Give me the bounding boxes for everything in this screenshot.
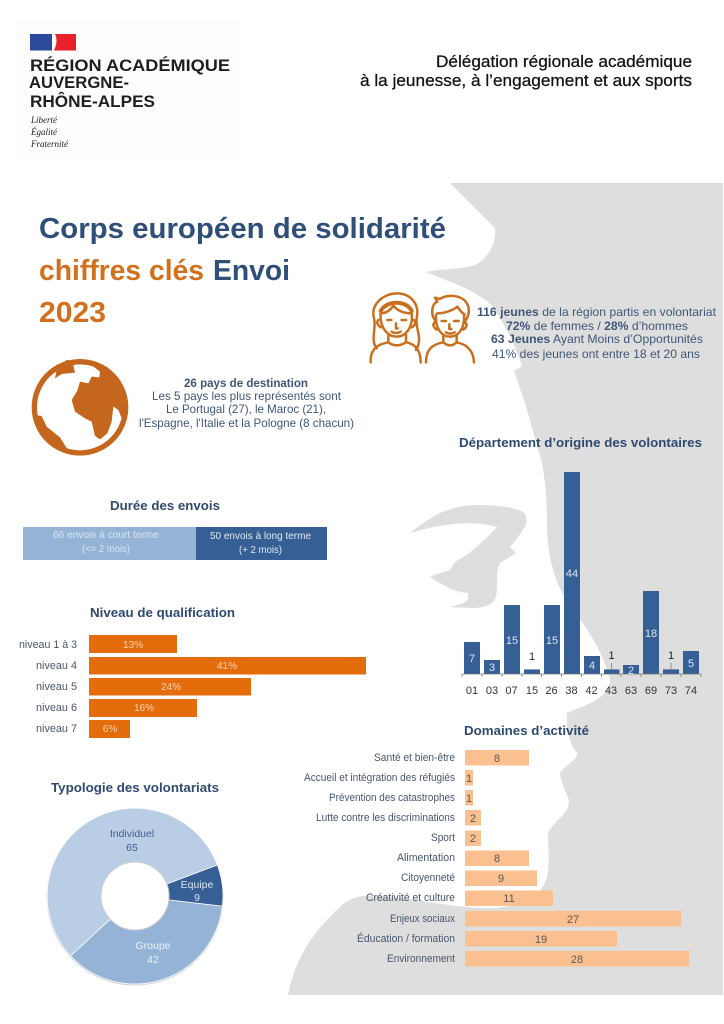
logo name: RHÔNE-ALPES <box>30 92 155 111</box>
chart: département d'origine: 38 <box>565 685 578 697</box>
chart: domaines d'activité: Environnement <box>387 953 455 965</box>
chart: domaines d'activité: Éducation / formation <box>357 932 455 945</box>
text: young people statistics: 72% de femmes / 28% d’hommes <box>506 319 688 333</box>
chart: département d'origine: 42 <box>585 685 598 697</box>
chart: domaines d'activité: 2 <box>470 813 476 825</box>
chart: niveau de qualification: 41% <box>217 661 237 672</box>
chart: domaines d'activité: 8 <box>494 753 500 765</box>
chart: domaines d'activité: 8 <box>494 853 500 865</box>
chart: domaines d'activité: Santé et bien-être <box>374 752 455 764</box>
chart: domaines d'activité: Prévention des catastrophes <box>329 792 455 804</box>
chart: département d'origine: 15 <box>546 635 558 647</box>
chart: domaines d'activité: 27 <box>567 914 579 926</box>
text: destinations: Le Portugal (27), le Maroc (21), <box>166 402 326 416</box>
chart: domaines d'activité: 1 <box>466 773 472 785</box>
title: 2023 <box>39 297 106 329</box>
title: Envoi <box>213 255 290 287</box>
icon: globe <box>34 360 127 453</box>
chart: département d'origine: 73 <box>665 685 677 697</box>
chart: typologie donut <box>46 808 224 986</box>
logo motto: Égalité <box>30 127 58 137</box>
chart: niveau de qualification: 24% <box>161 682 181 693</box>
logo: région académique <box>15 20 240 158</box>
heading: typologie des volontariats: Typologie des volontariats <box>51 780 219 795</box>
chart: typologie donut: Individuel <box>110 828 154 840</box>
chart: département d'origine: 07 <box>505 685 518 697</box>
icon: young people <box>371 293 474 362</box>
logo name <box>29 56 230 111</box>
text: destinations <box>139 376 354 430</box>
chart: département d'origine: 18 <box>645 628 657 640</box>
chart: domaines d'activité: Citoyenneté <box>401 872 455 884</box>
chart: durée des envois <box>23 527 327 560</box>
text: destinations: 26 pays de destination <box>184 376 308 390</box>
chart: durée des envois: 66 envois à court terme <box>53 529 159 541</box>
chart: département d'origine: 03 <box>486 685 498 697</box>
chart: niveau de qualification <box>19 635 366 738</box>
chart: domaines d'activité: 9 <box>498 873 504 885</box>
chart: département d'origine: 44 <box>566 568 578 580</box>
chart: durée des envois: (+ 2 mois) <box>239 544 282 556</box>
icon: french flag <box>30 34 76 50</box>
heading: domaines d'activité: Domaines d’activité <box>464 723 589 738</box>
chart: domaines d'activité: Créativité et culture <box>366 892 455 904</box>
chart: département d'origine: 4 <box>589 660 595 672</box>
slice: groupe <box>71 900 222 984</box>
text: young people statistics: 116 jeunes de la région partis en volontariat <box>477 305 717 319</box>
chart: département d'origine: 15 <box>526 685 538 697</box>
chart: niveau de qualification: 13% <box>123 640 143 651</box>
chart: département d'origine: 15 <box>506 635 518 647</box>
chart: durée des envois: 50 envois à long terme <box>210 530 311 542</box>
chart: département d'origine: 3 <box>489 662 495 674</box>
logo motto: Fraternité <box>30 139 69 149</box>
chart: niveau de qualification: niveau 6 <box>36 702 77 714</box>
title: chiffres clés <box>39 255 204 287</box>
chart: département d'origine: 01 <box>466 685 478 697</box>
chart: niveau de qualification: niveau 4 <box>36 660 77 672</box>
chart: domaines d'activité <box>304 750 689 966</box>
chart: niveau de qualification: niveau 7 <box>36 723 77 735</box>
text: young people statistics <box>477 305 717 361</box>
chart: département d'origine: 63 <box>625 685 637 697</box>
header: délégation <box>360 53 692 90</box>
chart: domaines d'activité: 1 <box>466 793 472 805</box>
chart: typologie donut: 9 <box>194 892 200 904</box>
text: young people statistics: 63 Jeunes Ayant Moins d’Opportunités <box>491 332 703 346</box>
chart: département d'origine: 1 <box>608 650 615 662</box>
logo name: RÉGION ACADÉMIQUE <box>30 56 230 75</box>
chart: domaines d'activité: Lutte contre les discriminations <box>316 812 455 824</box>
chart: département d'origine: 5 <box>688 658 694 670</box>
header: délégation: Délégation régionale académique <box>436 53 692 71</box>
chart: domaines d'activité: 19 <box>535 934 547 946</box>
background silhouette <box>288 183 723 995</box>
chart: niveau de qualification: 6% <box>103 724 117 735</box>
chart: département d'origine: 69 <box>645 685 657 697</box>
text: young people statistics: 41% des jeunes ont entre 18 et 20 ans <box>492 347 700 361</box>
chart: domaines d'activité: Enjeux sociaux <box>390 913 455 925</box>
text: destinations: l'Espagne, l'Italie et la Pologne (8 chacun) <box>139 416 354 430</box>
text: destinations: Les 5 pays les plus représentés sont <box>152 389 342 403</box>
heading: niveau de qualification: Niveau de qualification <box>90 605 235 620</box>
chart: département d'origine <box>462 472 701 697</box>
chart: département d'origine: 1 <box>529 651 535 663</box>
chart: durée des envois: (<= 2 mois) <box>82 543 130 555</box>
logo name: AUVERGNE- <box>29 73 129 92</box>
chart: niveau de qualification: niveau 1 à 3 <box>19 639 77 651</box>
slice: individuel <box>47 808 217 956</box>
chart: département d'origine: 26 <box>545 685 558 697</box>
chart: niveau de qualification: niveau 5 <box>36 681 77 693</box>
chart: domaines d'activité: 11 <box>503 893 515 905</box>
logo motto: Liberté <box>30 115 58 125</box>
chart: typologie donut: Equipe <box>181 879 214 891</box>
chart: département d'origine: 7 <box>469 653 475 665</box>
logo motto <box>30 115 69 149</box>
chart: typologie donut: Groupe <box>135 940 171 952</box>
heading: département d'origine: Département d’origine des volontaires <box>459 435 702 450</box>
chart: domaines d'activité: Accueil et intégration des réfugiés <box>304 772 455 784</box>
title <box>39 213 446 329</box>
chart: domaines d'activité: 2 <box>470 833 476 845</box>
chart: niveau de qualification: 16% <box>134 703 154 714</box>
header: délégation: à la jeunesse, à l’engagement et aux sports <box>360 72 692 90</box>
title: Corps européen de solidarité <box>39 213 446 245</box>
chart: typologie donut: 65 <box>126 842 138 854</box>
chart: département d'origine: 1 <box>668 650 674 662</box>
chart: département d'origine: 43 <box>605 685 617 697</box>
chart: département d'origine: 2 <box>628 665 634 677</box>
slice: equipe <box>167 865 223 906</box>
heading: durée des envois: Durée des envois <box>110 498 220 513</box>
chart: domaines d'activité: Sport <box>431 832 455 844</box>
chart: domaines d'activité: 28 <box>571 954 583 966</box>
chart: département d'origine: 74 <box>685 685 697 697</box>
chart: domaines d'activité: Alimentation <box>397 852 455 864</box>
chart: typologie donut: 42 <box>147 954 159 966</box>
